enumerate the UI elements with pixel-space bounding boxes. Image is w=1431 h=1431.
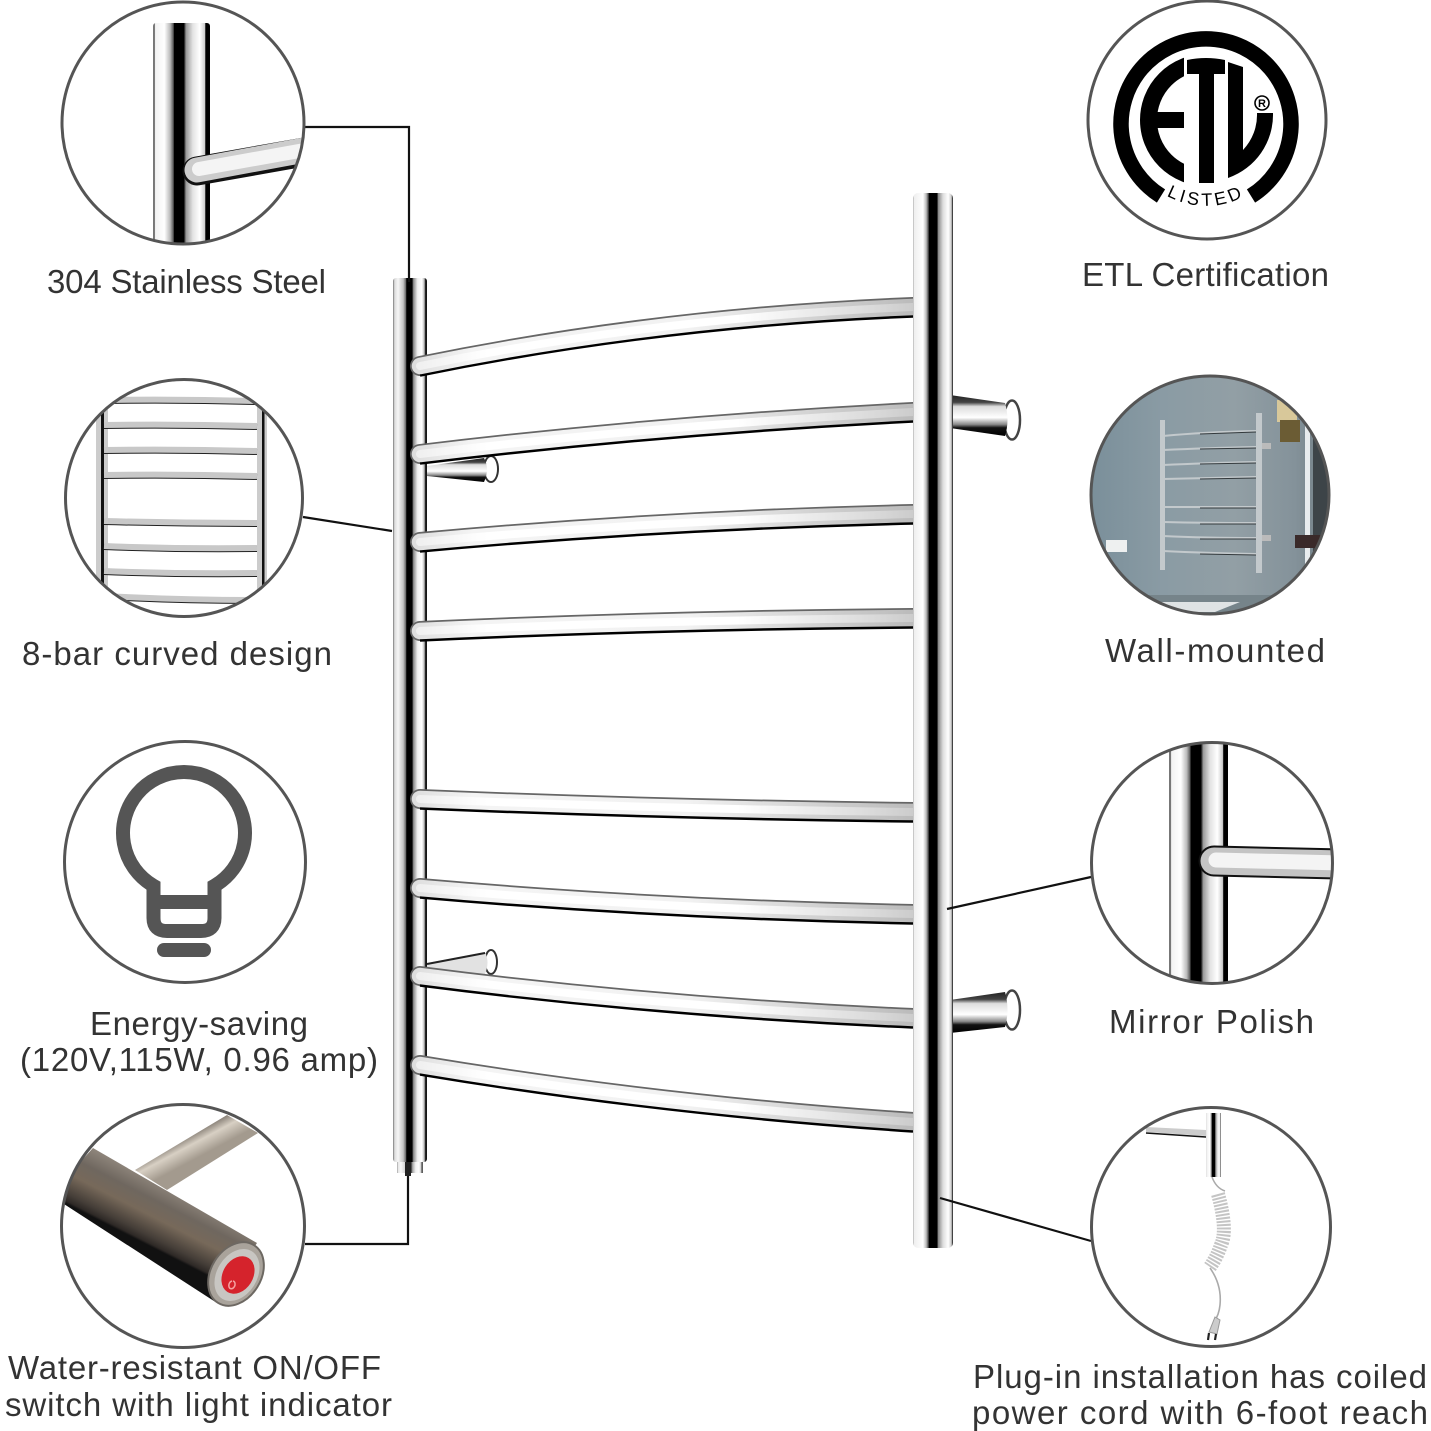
curved bar 6 xyxy=(420,888,913,923)
right wall bracket upper xyxy=(950,395,1020,440)
icon: ETL logo: R xyxy=(1258,98,1266,110)
curved bar 1 xyxy=(420,307,913,375)
caption: switch: switch with light indicator xyxy=(5,1386,392,1423)
curved bar 4 xyxy=(420,618,913,640)
right wall bracket lower xyxy=(950,990,1020,1033)
caption: plug-in cord: Plug-in installation has coiled xyxy=(973,1358,1427,1395)
coiled cord xyxy=(1208,1177,1225,1340)
caption: switch: Water-resistant ON/OFF xyxy=(8,1349,381,1386)
icon: light bulb xyxy=(123,772,245,957)
left wall bracket upper xyxy=(427,456,498,482)
icon: ETL logo: LISTED xyxy=(1168,185,1240,206)
icon: ETL logo xyxy=(1113,31,1299,206)
panel: ETL certification xyxy=(1086,0,1328,240)
caption: 8-bar curved design: 8-bar curved design xyxy=(22,635,332,672)
panel: 8-bar curved design xyxy=(66,380,302,620)
caption: plug-in cord xyxy=(972,1358,1428,1431)
left wall bracket lower xyxy=(427,950,497,974)
curved bar 8 xyxy=(420,1065,913,1131)
curved bar 2 xyxy=(420,412,913,463)
caption: switch xyxy=(5,1349,392,1423)
caption: plug-in cord: power cord with 6-foot reach xyxy=(972,1394,1428,1431)
mini towel rack xyxy=(1160,413,1271,573)
leader line: mirror polish xyxy=(947,877,1091,909)
leader line: power cord xyxy=(940,1198,1091,1241)
leader line: stainless steel xyxy=(305,127,409,282)
caption: Wall-mounted: Wall-mounted xyxy=(1105,632,1325,669)
switch end cap xyxy=(207,1242,265,1307)
curved bar 5 xyxy=(420,799,913,821)
panel: mirror polish xyxy=(1092,738,1340,988)
right upright pole xyxy=(913,193,953,1248)
towel warmer rack xyxy=(393,193,1020,1248)
panel: 304 stainless steel xyxy=(62,2,310,248)
caption: 304 Stainless Steel: 304 Stainless Steel xyxy=(47,263,326,300)
leader line: curved design xyxy=(303,517,392,531)
panel: plug-in cord xyxy=(1092,1108,1330,1346)
leader line: switch xyxy=(305,1176,408,1244)
caption: Mirror Polish: Mirror Polish xyxy=(1109,1003,1314,1040)
left upright pole xyxy=(393,278,427,1176)
caption: energy saving xyxy=(20,1005,378,1078)
panel: energy saving xyxy=(64,742,306,982)
caption: ETL Certification: ETL Certification xyxy=(1082,256,1329,293)
curved bar 3 xyxy=(420,514,913,551)
caption: energy saving: (120V,115W, 0.96 amp) xyxy=(20,1041,378,1078)
panel: wall-mounted xyxy=(1090,375,1333,617)
caption: energy saving: Energy-saving xyxy=(90,1005,308,1042)
curved bar 7 xyxy=(420,976,913,1027)
panel: on/off switch xyxy=(50,1104,304,1348)
